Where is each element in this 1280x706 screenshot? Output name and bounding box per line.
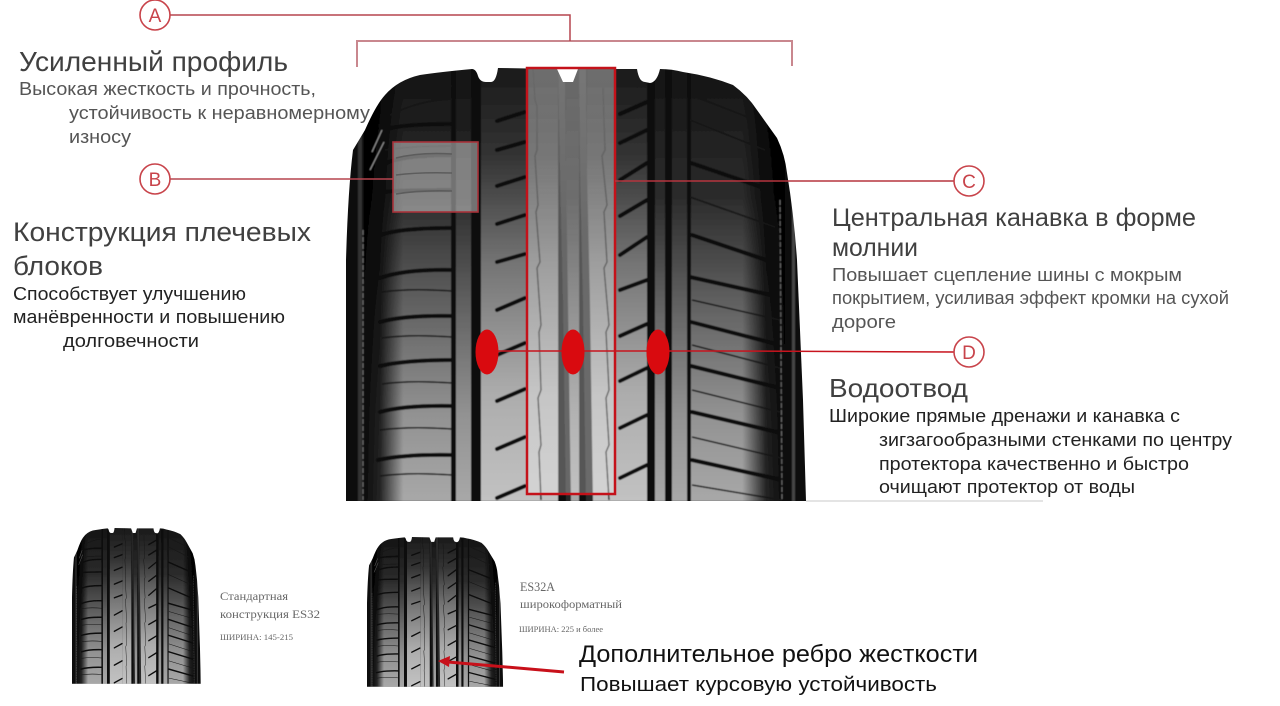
text block: central groove: Повышает сцепление шины с мокрым (832, 265, 1182, 285)
text block: water drainage: зигзагообразными стенками по центру (879, 430, 1232, 450)
text block: water drainage: Широкие прямые дренажи и канавка с (829, 406, 1180, 426)
text block: reinforced profile (19, 46, 370, 147)
text block: central groove: дороге (832, 312, 896, 332)
callout B: B (149, 170, 161, 191)
text block: shoulder blocks: манёвренности и повышению (13, 307, 285, 327)
text block: extra stiffening rib: Повышает курсовую устойчивость (580, 674, 937, 696)
text block: water drainage (829, 373, 1232, 497)
text block: water drainage: протектора качественно и быстро (879, 454, 1189, 474)
callout D with water channel markers (476, 330, 984, 374)
text block: central groove (832, 204, 1229, 332)
bracket A (170, 15, 792, 67)
callout C: C (962, 172, 976, 193)
label: standard ES32: конструкция ES32 (220, 607, 320, 621)
text block: shoulder blocks: Конструкция плечевых (13, 217, 312, 247)
label: standard ES32: Стандартная (220, 589, 288, 603)
text block: central groove: покрытием, усиливая эффект кромки на сухой (832, 288, 1229, 308)
text block: extra stiffening rib (579, 641, 978, 696)
text block: shoulder blocks: Способствует улучшению (13, 284, 246, 304)
text block: shoulder blocks: долговечности (63, 331, 199, 351)
label: wide ES32A: ШИРИНА: 225 и более (519, 625, 603, 634)
text block: reinforced profile: Усиленный профиль (19, 46, 288, 77)
small tire: wide ES32A (365, 534, 504, 688)
label: standard ES32: ШИРИНА: 145-215 (220, 633, 293, 642)
callout C (615, 166, 984, 196)
highlighted shoulder block box B (393, 142, 478, 212)
arrow: extra stiffening rib (438, 656, 564, 672)
text block: extra stiffening rib: Дополнительное ребро жесткости (579, 641, 978, 668)
text block: water drainage: Водоотвод (829, 373, 968, 403)
text block: reinforced profile: устойчивость к неравномерному (69, 103, 370, 123)
label: wide ES32A (519, 579, 623, 634)
callout D with water channel markers: D (962, 343, 976, 364)
highlighted central rib box C (527, 68, 615, 494)
label: wide ES32A: широкоформатный (520, 597, 623, 611)
text block: water drainage: очищают протектор от воды (879, 477, 1135, 497)
main tire tread photo (340, 60, 810, 505)
small tire: standard ES32 (70, 525, 202, 685)
text block: central groove: Центральная канавка в форме (832, 204, 1196, 232)
text block: reinforced profile: износу (69, 127, 131, 147)
label: standard ES32 (220, 589, 320, 642)
callout circle A: A (149, 6, 162, 27)
label: wide ES32A: ES32A (520, 579, 556, 594)
text block: central groove: молнии (832, 234, 918, 262)
text block: shoulder blocks (13, 217, 312, 351)
text block: reinforced profile: Высокая жесткость и прочность, (19, 79, 316, 99)
callout circle A (140, 0, 170, 30)
text block: shoulder blocks: блоков (13, 251, 103, 281)
callout B (140, 164, 393, 194)
